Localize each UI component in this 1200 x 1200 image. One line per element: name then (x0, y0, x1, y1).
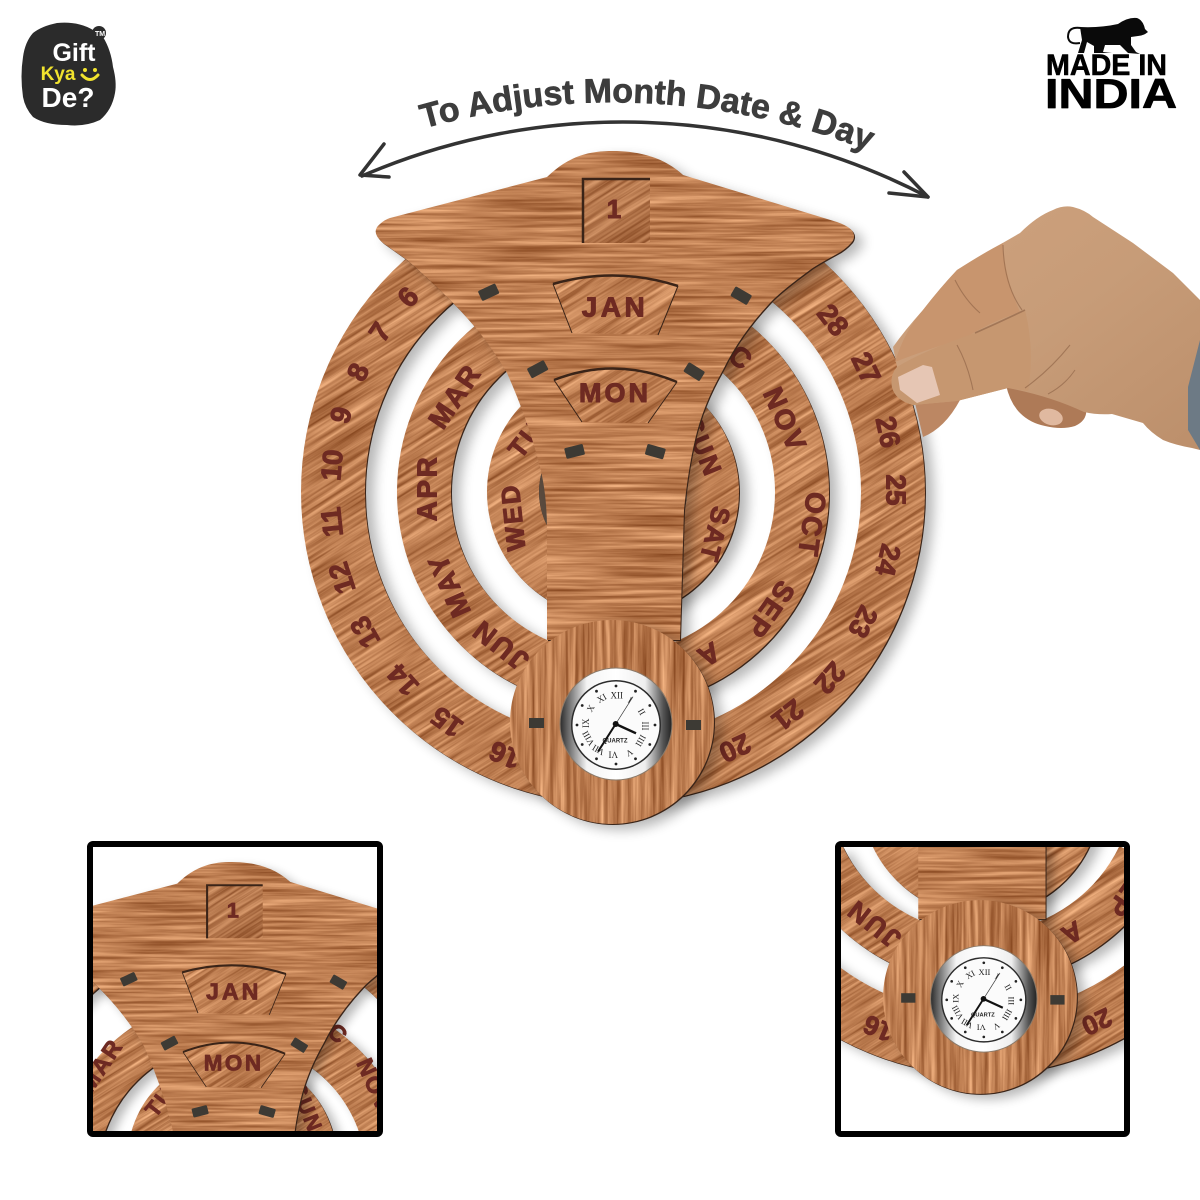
inset: close-up of clock (835, 841, 1130, 1137)
date numbers on outer ring: 16 (485, 735, 525, 775)
date numbers on outer ring: 15 (425, 700, 469, 744)
scaled calendar top: APR (65, 1114, 91, 1169)
date numbers on outer ring: 22 (808, 656, 852, 700)
month names on middle ring: OCT (792, 490, 832, 560)
front panel with date, month and day windows (376, 151, 854, 640)
date numbers on outer ring: 8 (341, 358, 375, 386)
month names on middle ring: MAR (422, 358, 488, 434)
month names on middle ring: APR (412, 455, 442, 521)
inset: close-up of date, month and day windows (87, 841, 383, 1137)
logo: Gift Kya De: De? (42, 82, 94, 113)
thumbnail (898, 365, 940, 403)
month names on middle ring: A (690, 636, 726, 674)
clock numerals: IIII (633, 733, 648, 748)
date numbers on outer ring: 14 (381, 658, 425, 702)
date numbers on outer ring: 11 (315, 506, 349, 538)
scaled calendar top: 1 (227, 898, 239, 923)
scaled calendar bottom: V (991, 1020, 1002, 1032)
day names on inner ring: TUE (502, 398, 562, 464)
icon: lion (1068, 18, 1148, 54)
logo: Gift Kya De (22, 23, 116, 125)
scaled calendar bottom: XII (979, 967, 991, 977)
date numbers on outer ring: 13 (344, 611, 386, 653)
sleeve (1188, 340, 1200, 450)
date numbers on outer ring: 9 (324, 403, 358, 427)
day names on inner ring: SAT (693, 503, 737, 567)
index finger shading (895, 243, 1020, 362)
scaled calendar top: MAR (74, 1034, 128, 1097)
back of hand and palm (892, 206, 1200, 450)
clock numerals: QUARTZ (602, 739, 628, 745)
scaled calendar top: TUE (140, 1067, 190, 1122)
rotating date, month and day rings (333, 212, 893, 772)
date numbers on outer ring: 12 (322, 558, 362, 598)
window labels: current date, month and day: JAN (582, 292, 648, 322)
date numbers on outer ring: 6 (391, 281, 425, 313)
month names on middle ring (412, 339, 832, 677)
month names on middle ring: SEP (739, 575, 801, 645)
month names on middle ring: C (722, 339, 760, 377)
scaled calendar bottom: XI (964, 968, 977, 981)
logo: Made in India: INDIA (1045, 70, 1177, 117)
inset art (841, 847, 1124, 1106)
scaled calendar bottom: VIII (949, 1003, 965, 1021)
clock numerals: XII (610, 691, 623, 701)
heading: curved instruction text: To Adjust Month Date & Day (418, 78, 876, 154)
day names on inner ring (495, 398, 737, 567)
date numbers on outer ring: 23 (842, 601, 884, 643)
window labels: current date, month and day: 1 (607, 194, 621, 224)
clock numerals: V (624, 747, 635, 759)
date numbers on outer ring: 26 (870, 414, 906, 450)
scaled calendar bottom: VI (977, 1023, 986, 1033)
scaled calendar bottom: VII (959, 1016, 975, 1031)
inset frame (90, 844, 380, 1134)
scaled calendar bottom: JUN (841, 893, 907, 954)
curled fingernail (1037, 406, 1065, 428)
logo: Gift Kya De: Gift (52, 39, 96, 67)
day names on inner ring: WED (495, 482, 531, 552)
date numbers on outer ring (315, 281, 912, 775)
scaled calendar top: NOV (351, 1054, 398, 1116)
window labels: current date, month and day (579, 194, 651, 408)
clock numerals: XI (595, 692, 608, 705)
day names on inner ring: SUN (677, 412, 729, 482)
clock numerals: I (626, 695, 634, 705)
clock disc with quartz clock (510, 620, 714, 824)
arrow: double-headed curved adjust arrow (360, 122, 928, 197)
scaled calendar bottom: 16 (859, 1009, 898, 1048)
date numbers on outer ring: 21 (766, 693, 810, 737)
window labels: current date, month and day: MON (579, 378, 651, 408)
month names on middle ring: JUN (465, 613, 535, 677)
scaled calendar bottom (841, 847, 1124, 1106)
clock numerals: VII (590, 743, 606, 757)
knuckle creases (955, 245, 1075, 394)
logo: Gift Kya De: TM (95, 31, 105, 38)
date numbers on outer ring: 28 (811, 298, 855, 342)
inset art (93, 862, 377, 1131)
scaled calendar bottom: SEP (1101, 857, 1160, 924)
scaled calendar bottom: QUARTZ (971, 1013, 995, 1019)
scaled calendar bottom: IX (950, 993, 960, 1003)
product: main wooden calendar (315, 151, 912, 824)
date numbers on outer ring: 20 (714, 727, 756, 769)
scaled calendar top: SUN (285, 1079, 328, 1136)
date numbers on outer ring: 27 (845, 347, 887, 389)
lower finger behind thumb (915, 400, 960, 437)
scaled calendar bottom: A (1054, 915, 1088, 952)
date numbers on outer ring: 25 (880, 474, 912, 506)
date numbers on outer ring: 10 (315, 448, 349, 482)
scaled calendar bottom: I (993, 971, 1001, 981)
clock numerals (580, 691, 650, 759)
month names on middle ring: NOV (757, 383, 813, 457)
clock numerals: III (640, 722, 650, 730)
scaled calendar top: JAN (206, 978, 261, 1004)
date numbers on outer ring: 24 (869, 541, 907, 579)
scaled calendar top (93, 862, 377, 1131)
inset frame (838, 844, 1127, 1134)
thumb (892, 310, 1031, 405)
scaled calendar bottom: IIII (1000, 1007, 1014, 1022)
scaled calendar bottom: X (954, 978, 966, 989)
logo: Gift Kya De: Kya (41, 64, 76, 85)
clock numerals: VIII (580, 729, 597, 748)
curled finger (1006, 385, 1086, 428)
logo: Made in India: MADE IN (1046, 49, 1167, 82)
date numbers on outer ring: 7 (363, 317, 397, 347)
scaled calendar top: MON (204, 1050, 264, 1075)
clock numerals: X (585, 703, 597, 714)
logo: Made in India (1045, 18, 1177, 117)
scaled calendar bottom: II (1002, 982, 1014, 992)
clock numerals: II (636, 707, 648, 717)
clock numerals: IX (581, 718, 591, 728)
clock numerals: VI (609, 749, 618, 759)
scaled calendar top: C (323, 1018, 354, 1050)
scaled calendar bottom: III (1006, 997, 1016, 1005)
month names on middle ring: MAY (421, 548, 477, 622)
scaled calendar bottom: 20 (1077, 1002, 1117, 1042)
hand holding outer ring (892, 206, 1200, 450)
